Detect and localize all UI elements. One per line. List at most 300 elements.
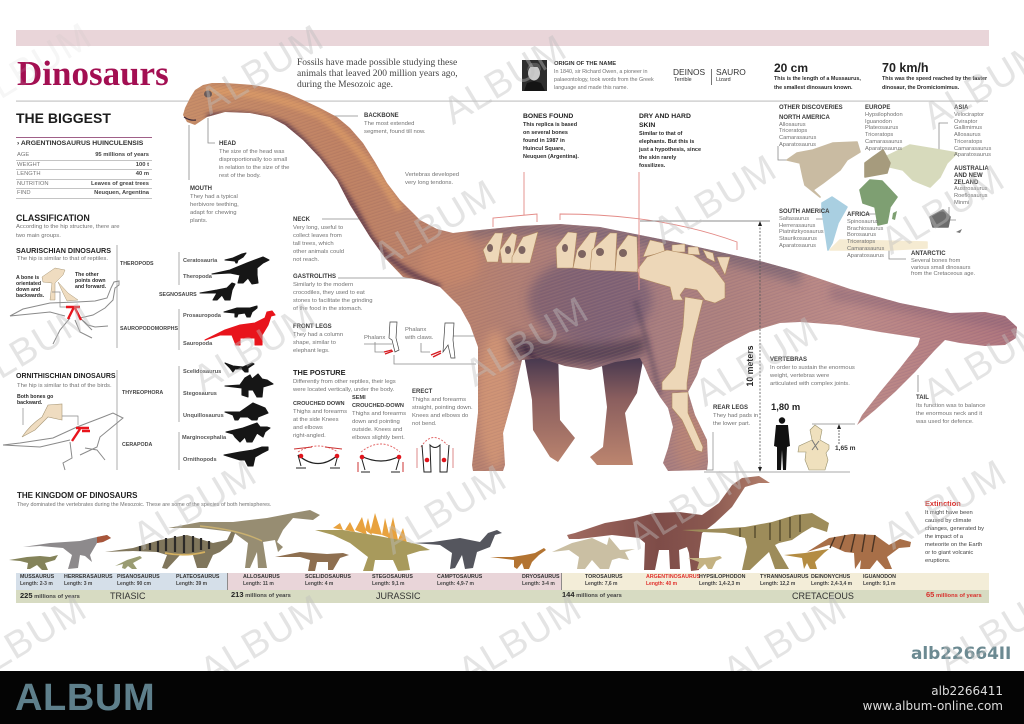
map notes: other discoveries, north america: Aparatosaurus (779, 142, 816, 148)
table: argentinosaurus huinculensis (16, 137, 152, 198)
classification intro: two main groups. (16, 232, 61, 238)
word parts: sauro (716, 67, 746, 83)
heading: the biggest: THE BIGGEST (16, 110, 111, 126)
note: erect: straight, pointing down. (412, 405, 473, 411)
dinosaur: mussaurus (9, 555, 58, 570)
note: dry and hard skin: Similar to that of (639, 131, 682, 137)
ornithischian note: The hip is similar to that of the birds. (17, 383, 112, 389)
dinosaur: scelidosaurus (275, 552, 349, 571)
intro text (297, 58, 458, 90)
species: allosaurus (243, 574, 280, 587)
footer reference: alb2266411 (931, 684, 1003, 698)
intro text: Fossils have made possible studying these (297, 58, 457, 68)
watermarks: ALBUM (193, 17, 331, 123)
species: dryosaurus (522, 574, 559, 588)
callout: extinction: changes, generated by (925, 526, 984, 532)
stat: 20 cm (774, 61, 861, 91)
stat: 20 cm: the smallest dinosaurs known. (774, 85, 852, 91)
group: thyreophora: THYREOPHORA (122, 390, 163, 396)
footer reference: www.album-online.com (863, 699, 1003, 713)
note: semi crouched-down: CROUCHED-DOWN (352, 403, 404, 409)
label: phalanx: Phalanx (364, 335, 385, 341)
note: erect: Knees and elbows do (412, 413, 468, 419)
row: find (16, 189, 152, 198)
watermarks: ALBUM (688, 309, 826, 415)
timeline band: triassic (16, 573, 227, 590)
species: argentinosaurus: ARGENTINOSAURUS (646, 574, 700, 580)
note: bones found: Neuquen (Argentina). (523, 154, 579, 160)
origin of the name (554, 61, 654, 91)
note: both bones: backward. (17, 400, 42, 406)
dinosaur: dryosaurus (490, 548, 546, 569)
icon: human silhouette for scale (774, 417, 790, 470)
chart: 10 meters height scale (640, 221, 850, 472)
note: front legs: FRONT LEGS (293, 324, 332, 330)
map notes: africa: Brachiosaurus (847, 226, 883, 232)
era: 213 million years: 213 millions of years (231, 590, 291, 599)
note: front legs: elephant legs. (293, 348, 330, 354)
map notes: australia and new zeland: Minmi (954, 200, 969, 206)
heading: the posture (293, 368, 396, 393)
title: Dinosaurs (17, 54, 169, 93)
stat: 70 km/h: 70 km/h (882, 61, 929, 75)
map notes: australia and new zeland: Austrosaurus (954, 186, 988, 192)
note: crouched down: at the side Knees (293, 417, 339, 423)
note: crouched down: and elbows (293, 425, 323, 431)
note: dry and hard skin: fossilizes. (639, 163, 665, 169)
origin of the name: ORIGIN OF THE NAME (554, 61, 616, 67)
label: stegosaurus: Stegosaurus (183, 391, 217, 397)
group: segnosaurs: SEGNOSAURS (159, 292, 197, 298)
note: tail: the enormous neck and it (916, 411, 982, 417)
group: cerapoda: CERAPODA (122, 442, 152, 448)
species: herrerasaurus: HERRERASAURUS (64, 574, 113, 580)
note: head (219, 140, 290, 179)
species: dryosaurus: Length: 3-4 m (522, 581, 555, 587)
intro text: animals that leaved 200 million years ago, (297, 69, 458, 79)
note: gastroliths: stones to facilitate the grinding (293, 298, 373, 304)
group: sauropodomorphs: SAUROPODOMORPHS (120, 326, 178, 332)
map notes: asia: Oviraptor (954, 118, 977, 124)
era: triasic: TRIASIC (110, 591, 146, 601)
map notes: other discoveries, north america (779, 104, 843, 148)
dinosaur: torosaurus (552, 537, 635, 569)
origin of the name: language and made this name. (554, 85, 628, 91)
map notes: australia and new zeland: ZELAND (954, 180, 978, 186)
label: ceratosauria: Ceratosauria (183, 258, 217, 264)
silhouettes: classification groups (200, 253, 275, 466)
map notes: europe: Aparatosaurus (865, 146, 902, 152)
note: vertebras (770, 356, 855, 387)
note: rear legs: REAR LEGS (713, 405, 748, 411)
note: head: in relation to the size of the (219, 165, 289, 171)
row: age (16, 151, 152, 160)
diagram: saurischian hip and outline (10, 268, 119, 344)
note: tail (916, 394, 986, 425)
callout: extinction: eruptions. (925, 558, 950, 564)
species: pisanosaurus (117, 574, 160, 587)
map notes: antarctic: ANTARCTIC (911, 251, 946, 257)
note: gastroliths: of the food in the stomach. (293, 306, 362, 312)
note: mouth: adapt for chewing (190, 210, 237, 216)
note: bone forward: The other (75, 272, 99, 278)
heading: the posture: were located vertically, under the body. (293, 387, 394, 393)
row: nutrition: NUTRITION (17, 180, 49, 186)
map notes: africa: Spinosaurus (847, 219, 879, 225)
dinosaur: argentinosaurus small (567, 476, 770, 571)
watermarks: ALBUM (366, 172, 504, 278)
image id: alb22664II (911, 644, 1011, 664)
species: hypsilophodon (699, 574, 746, 588)
note: semi crouched-down: SEMI (352, 395, 366, 401)
note: mouth: They had a typical (190, 194, 238, 200)
note: bones found: This replica is based (523, 122, 577, 128)
species: scelidosaurus: SCELIDOSAURUS (305, 574, 351, 580)
label: ornithopods: Ornithopods (183, 457, 217, 463)
row: weight: 100 t (136, 162, 149, 168)
note: mouth: herbivore teething, (190, 202, 239, 208)
diagram: semi crouched-down posture (358, 444, 403, 472)
diagram: erect posture (417, 438, 453, 472)
note: rear legs: They had pads in (713, 413, 758, 419)
note: backbone: BACKBONE (364, 113, 399, 119)
heading: the posture: Differently from other reptiles, their legs (293, 379, 396, 385)
note: dry and hard skin: DRY AND HARD (639, 113, 691, 120)
stat: 70 km/h (882, 61, 987, 91)
note: vertebras: articulated with complex joints. (770, 381, 850, 387)
species: stegosaurus: STEGOSAURUS (372, 574, 413, 580)
callout: extinction: meteorite on the Earth (925, 542, 982, 548)
note: erect: ERECT (412, 389, 432, 395)
note: front legs: They had a column (293, 332, 343, 338)
map notes: europe (865, 104, 903, 152)
note: crouched down: CROUCHED DOWN (293, 401, 345, 407)
note: front legs: shape, similar to (293, 340, 336, 346)
dinosaur: hypsilophodon (688, 556, 722, 569)
species: allosaurus: ALLOSAURUS (243, 574, 280, 580)
word parts: deinos (673, 67, 705, 83)
map notes: australia and new zeland: AUSTRALIA (954, 166, 989, 172)
note: neck (293, 216, 344, 263)
map notes: asia: Velociraptor (954, 112, 984, 118)
note: head: disproportionally too small (219, 157, 287, 163)
species: tyrannosaurus: TYRANNOSAURUS (760, 574, 809, 580)
stat: 20 cm: 20 cm (774, 61, 808, 75)
label: unquillosaurus: Unquillosaurus (183, 413, 224, 419)
note: vertebras: weight, vertebras were (770, 373, 829, 379)
era: 144 million years: 144 millions of years (562, 590, 622, 599)
note: bones found: on several bones (523, 130, 568, 136)
species: mussaurus: Length: 2-3 m (20, 581, 53, 587)
group: theropods: THEROPODS (120, 261, 154, 267)
note: head: The size of the head was (219, 149, 284, 155)
row: age: 95 millions of years (95, 152, 149, 158)
species: stegosaurus: Length: 9,1 m (372, 581, 405, 587)
callout: extinction: caused by climate (925, 518, 971, 524)
map notes: other discoveries, north america: Allosaurus (779, 122, 806, 128)
note: backbone (364, 112, 426, 135)
map notes: south america (779, 208, 830, 249)
map notes: south america: Piatnitzkyosaurus (779, 229, 824, 235)
species: scelidosaurus: Length: 4 m (305, 581, 333, 587)
illustration: Argentinosaurus body (180, 80, 1024, 480)
row: length: LENGTH (17, 171, 41, 177)
dinosaur: plateosaurus (105, 528, 237, 569)
note: bone forward: and forward. (75, 284, 106, 290)
stat: 70 km/h: dinosaur, the Dromiciomimus. (882, 85, 959, 91)
note: bone backward: down and (16, 287, 40, 293)
footer logo: ALBUM (15, 677, 155, 719)
map notes: australia and new zeland: Roeflosaurus (954, 193, 988, 199)
note: both bones: Both bones go (17, 394, 53, 400)
watermarks: ALBUM (646, 147, 784, 253)
row: length: 40 m (136, 171, 149, 177)
illustration: vertebra at scale (798, 424, 855, 470)
label: phalanx with claws: with claws. (405, 335, 433, 341)
species: iguanodon: IGUANODON (863, 574, 896, 580)
saurischian note: The hip is similar to that of reptiles. (17, 256, 108, 262)
note: rear legs: the lower part. (713, 421, 750, 427)
callout: extinction: It might have been (925, 510, 973, 516)
callout: extinction (925, 500, 984, 565)
illustration: fossil bones found (483, 232, 730, 452)
map notes: australia and new zeland (954, 166, 989, 206)
map notes: other discoveries, north america: Camarasaurus (779, 135, 816, 141)
heading: classification: CLASSIFICATION (16, 213, 90, 223)
map notes: south america: Aparatosaurus (779, 243, 816, 249)
note: vertebras: In order to sustain the enormous (770, 365, 855, 371)
era: jurassic: JURASSIC (376, 591, 421, 601)
row: length (16, 170, 152, 180)
diagram: phalanx front legs (384, 322, 455, 358)
note: dry and hard skin (638, 113, 701, 169)
note: bone backward: orientated (16, 281, 41, 287)
era: 225 million years: 225 millions of years (20, 591, 80, 600)
note: tail: TAIL (916, 395, 929, 401)
species: tyrannosaurus (760, 574, 809, 588)
species: deinonychus (811, 574, 852, 588)
map notes: africa: Aparatosaurus (847, 252, 884, 258)
species: tyrannosaurus: Length: 12,2 m (760, 581, 795, 587)
note: bone forward (75, 272, 106, 290)
note: gastroliths: crocodiles, they used to eat (293, 290, 365, 296)
dinosaur: stegosaurus (315, 513, 430, 571)
note: head: HEAD (219, 141, 236, 147)
map notes: europe: Camarasaurus (865, 139, 902, 145)
watermarks: ALBUM (436, 27, 574, 133)
species: torosaurus (585, 574, 623, 588)
note: vertebras tendons: very long tendons. (405, 180, 453, 186)
origin of the name: palaeontology, took words from the Greek (554, 77, 654, 83)
map notes: asia: Gallimimus (954, 125, 982, 131)
stat: 70 km/h: This was the speed reached by the faster (882, 76, 987, 82)
era: cretaceous: CRETACEOUS (792, 591, 854, 601)
map notes: asia: Allosaurus (954, 132, 981, 138)
label: prosauropoda: Prosauropoda (183, 313, 221, 319)
note: bone backward: backwards. (16, 293, 44, 299)
map notes: south america: SOUTH AMERICA (779, 209, 829, 215)
label: phalanx with claws (405, 327, 433, 341)
note: bones found: BONES FOUND (523, 113, 573, 120)
callout: extinction: or to giant volcanic (925, 550, 973, 556)
dinosaur: deinonychus (784, 549, 829, 569)
note: tail: was used for defence. (916, 419, 974, 425)
note: mouth (190, 186, 239, 224)
era: 65 million years: 65 millions of years (926, 590, 982, 599)
row: find: Neuquen, Argentina (94, 190, 149, 196)
diagram: crouched-down posture (294, 446, 342, 468)
note: neck: tall trees, which (293, 241, 334, 247)
row: weight: WEIGHT (17, 162, 40, 168)
label: phalanx with claws: Phalanx (405, 327, 426, 333)
species: iguanodon (863, 574, 896, 588)
note: neck: Very long, useful to (293, 225, 343, 231)
map notes: asia: Aparatosaurus (954, 152, 991, 158)
chart: world map of discoveries (787, 142, 962, 250)
label: sauropoda: Sauropoda (183, 341, 212, 347)
species: iguanodon: Length: 9,1 m (863, 581, 896, 587)
note: bones found: Huincul Square, (523, 146, 565, 152)
species: plateosaurus: PLATEOSAURUS (176, 574, 219, 580)
callout: extinction: the impact of a (925, 534, 963, 540)
map notes: europe: Triceratops (865, 132, 893, 138)
note: backbone: segment, found till now. (364, 129, 426, 135)
note: vertebras tendons (405, 172, 459, 186)
map notes: africa: Borosaurus (847, 232, 876, 238)
map notes: antarctic (911, 250, 975, 277)
note: dry and hard skin: the skin rarely (639, 155, 676, 161)
map notes: africa: AFRICA (847, 212, 870, 218)
species: deinonychus: DEINONYCHUS (811, 574, 850, 580)
note: tail: Its function was to balance (916, 403, 985, 409)
map notes: asia: Triceratops (954, 139, 982, 145)
note: mouth: plants. (190, 218, 207, 224)
timeline band: cretaceous (562, 573, 989, 590)
species: plateosaurus: Length: 39 m (176, 581, 207, 587)
note: backbone: The most extended (364, 121, 414, 127)
note: semi crouched-down (352, 395, 406, 441)
kingdom intro: They dominated the vertebrates during the Mesozoic. These are some of the species of both hemispheres. (17, 502, 271, 508)
heading: the kingdom of dinosaurs: THE KINGDOM OF DINOSAURS (17, 491, 137, 500)
species: allosaurus: Length: 11 m (243, 581, 274, 587)
dinosaur: tyrannosaurus (682, 513, 829, 570)
note: gastroliths: Similarly to the modern (293, 282, 353, 288)
label: theropoda: Theropoda (183, 274, 212, 280)
map notes: antarctic: Several bones from (911, 258, 960, 264)
timeline band: era strip (16, 590, 989, 603)
footer reference (863, 684, 1003, 714)
species: scelidosaurus (305, 574, 351, 587)
origin of the name: In 1840, sir Richard Owen, a pioneer in (554, 69, 648, 75)
label: vertebra height: 1,65 m (835, 445, 856, 452)
row: nutrition: Leaves of great trees (91, 180, 149, 186)
intro text: during the Mesozoic age. (297, 80, 393, 90)
species: torosaurus: Length: 7,6 m (585, 581, 618, 587)
species: torosaurus: TOROSAURUS (585, 574, 623, 580)
map notes: africa: Triceratops (847, 239, 875, 245)
map notes: antarctic: various small dinosaurs (911, 264, 970, 270)
species: argentinosaurus (646, 574, 700, 588)
heading: ornithischian dinosaurs: ORNITHISCHIAN DINOSAURS (16, 373, 116, 380)
diagram: ornithischian hip and outline (3, 404, 123, 470)
note: vertebras tendons: Vertebras developed (405, 172, 459, 178)
map notes: africa: Camarasaurus (847, 246, 884, 252)
watermarks: ALBUM (126, 452, 264, 558)
watermarks: ALBUM (876, 452, 1014, 558)
note: dry and hard skin: elephants. But this is (639, 139, 694, 145)
note: bone backward: A bone is (16, 275, 39, 281)
note: dry and hard skin: just a hypothesis, since (639, 147, 701, 153)
watermarks: ALBUM (621, 452, 759, 558)
note: semi crouched-down: down and pointing (352, 419, 400, 425)
dinosaur: herrerasaurus (23, 535, 111, 569)
map notes: asia: ASIA (954, 105, 968, 111)
footer black band (0, 671, 1024, 724)
note: neck: not reach. (293, 257, 319, 263)
watermarks: ALBUM (376, 457, 514, 563)
note: semi crouched-down: outside. Knees and (352, 427, 402, 433)
map notes: asia (954, 104, 992, 158)
note: gastroliths: GASTROLITHS (293, 274, 336, 280)
species: dryosaurus: DRYOSAURUS (522, 574, 559, 580)
note: bones found: found in 1987 in (523, 138, 565, 144)
label: human height: 1,80 m (771, 401, 800, 412)
dinosaur: allosaurus (168, 510, 320, 568)
note: erect: Thighs and forearms (412, 397, 466, 403)
classification intro: According to the hip structure, there are (16, 224, 119, 230)
row: weight (16, 160, 152, 170)
note: bone forward: points down (75, 278, 106, 284)
note: crouched down (293, 401, 347, 439)
map notes: south america: Staurikosaurus (779, 236, 817, 242)
note: front legs (293, 324, 343, 354)
watermarks: ALBUM (874, 157, 1012, 263)
map notes: other discoveries, north america: Triceratops (779, 128, 807, 134)
note: bone backward (16, 275, 44, 299)
species: herrerasaurus: Length: 3 m (64, 581, 92, 587)
word parts: sauro: Lizard (716, 77, 731, 83)
top pink band (16, 30, 989, 46)
map notes: australia and new zeland: AND NEW (954, 173, 983, 179)
note: dry and hard skin: SKIN (639, 122, 655, 128)
heading: saurischian dinosaurs: SAURISCHIAN DINOSAURS (16, 246, 111, 255)
note: neck: collect leaves from (293, 233, 342, 239)
divider deinos sauro (711, 69, 712, 85)
row: find: FIND (17, 190, 31, 196)
note: erect (412, 388, 473, 427)
species: hypsilophodon: HYPSILOPHODON (699, 574, 746, 580)
species: camptosaurus: Length: 4,9-7 m (437, 581, 474, 587)
map notes: antarctic: from the Cretaceous age. (911, 271, 975, 277)
species: pisanosaurus: Length: 90 cm (117, 581, 151, 587)
stat: 20 cm: This is the length of a Mussaurus, (774, 76, 861, 82)
label: 10 meters: 10 meters (745, 345, 755, 387)
species: pisanosaurus: PISANOSAURUS (117, 574, 160, 580)
species: mussaurus: MUSSAURUS (20, 574, 54, 580)
note: neck: NECK (293, 217, 310, 223)
note: head: rest of the body. (219, 173, 261, 179)
map notes: europe: Iguanodon (865, 118, 892, 124)
note: mouth: MOUTH (190, 186, 212, 192)
word parts: sauro: SAURO (716, 67, 746, 77)
note: rear legs (713, 404, 758, 427)
map notes: europe: Hypsilophodon (865, 112, 903, 118)
row: age: AGE (17, 152, 29, 158)
heading: the posture: THE POSTURE (293, 368, 346, 377)
label: marginocephalia: Marginocephalia (182, 435, 226, 441)
note: both bones (17, 394, 54, 406)
note: semi crouched-down: Thighs and forearms (352, 411, 406, 417)
